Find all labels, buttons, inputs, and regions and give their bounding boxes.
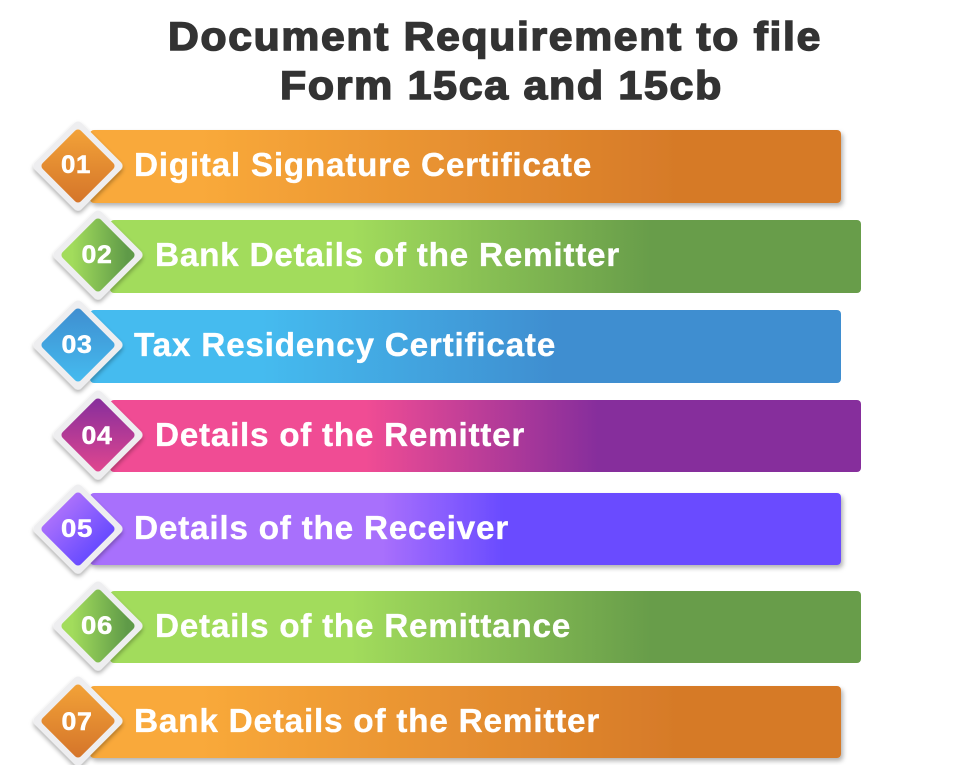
item 04: Details of the Remitter: 04 xyxy=(82,422,112,450)
item 05: Details of the Receiver: 05 xyxy=(61,515,93,543)
item 03: Tax Residency Certificate xyxy=(31,298,841,392)
item 07: Bank Details of the Remitter: 07 xyxy=(62,708,92,736)
item 05: Details of the Receiver xyxy=(31,482,841,576)
item 02: Bank Details of the Remitter: 02 xyxy=(82,241,112,269)
item 06: Details of the Remittance: 06 xyxy=(81,612,113,640)
item 01: Digital Signature Certificate: 01 xyxy=(61,151,91,179)
title: Form 15ca and 15cb xyxy=(280,64,723,108)
item 03: Tax Residency Certificate: Tax Residency Certificate xyxy=(134,326,556,363)
title xyxy=(168,15,822,108)
item 02: Bank Details of the Remitter: Bank Details of the Remitter xyxy=(155,236,620,273)
item 06: Details of the Remittance: Details of the Remittance xyxy=(155,607,571,644)
item 07: Bank Details of the Remitter: Bank Details of the Remitter xyxy=(134,702,600,739)
title: Document Requirement to file xyxy=(168,15,822,59)
item 03: Tax Residency Certificate: 03 xyxy=(62,331,92,359)
item 06: Details of the Remittance xyxy=(51,579,861,673)
item 02: Bank Details of the Remitter xyxy=(51,208,861,302)
item 01: Digital Signature Certificate: Digital Signature Certificate xyxy=(134,146,592,183)
item 01: Digital Signature Certificate xyxy=(31,119,841,213)
item 04: Details of the Remitter: Details of the Remitter xyxy=(155,416,525,453)
item 05: Details of the Receiver: Details of the Receiver xyxy=(134,509,509,546)
item 07: Bank Details of the Remitter xyxy=(31,674,841,765)
item 04: Details of the Remitter xyxy=(51,388,861,482)
